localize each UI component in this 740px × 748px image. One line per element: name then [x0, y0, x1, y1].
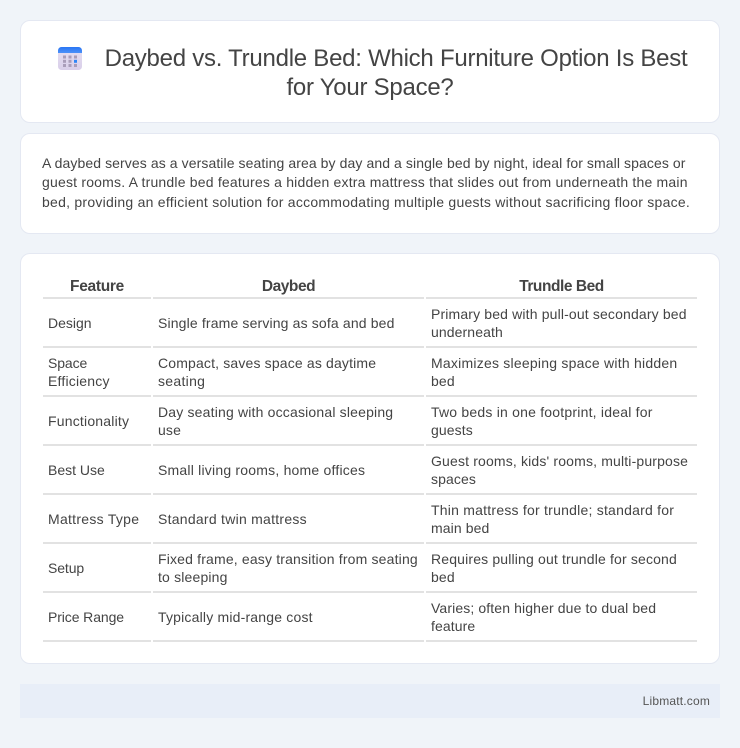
comparison table: seating — [158, 373, 205, 389]
panel: title card — [20, 20, 720, 123]
text block: intro — [42, 155, 690, 210]
comparison table: Guest rooms, kids' rooms, multi-purpose — [431, 453, 688, 469]
title: Daybed vs. Trundle Bed: Which Furniture Option Is Best — [105, 45, 687, 72]
comparison table: Two beds in one footprint, ideal for — [431, 404, 653, 420]
text block: intro: bed, providing an efficient solution for accommodating multiple guests without sacrificing floor space. — [42, 194, 690, 210]
comparison table: main bed — [431, 520, 489, 536]
comparison table: spaces — [431, 471, 476, 487]
text block: intro: guest rooms. A trundle bed features a hidden extra mattress that slides out from underneath the main — [42, 174, 688, 190]
comparison table: Requires pulling out trundle for second — [431, 551, 677, 567]
comparison table: bed — [431, 569, 455, 585]
comparison table: guests — [431, 422, 473, 438]
comparison table: to sleeping — [158, 569, 228, 585]
comparison table: Efficiency — [48, 373, 110, 389]
table rows — [48, 306, 688, 634]
footer — [20, 684, 720, 718]
comparison table: Typically mid-range cost — [158, 609, 313, 625]
comparison table: Setup — [48, 560, 84, 576]
text block: intro: A daybed serves as a versatile seating area by day and a single bed by night, ideal for small spaces or — [42, 155, 686, 171]
table header — [70, 278, 604, 295]
footer credit: Libmatt.com — [643, 694, 710, 708]
comparison table: Functionality — [48, 413, 129, 429]
title: for Your Space? — [286, 74, 454, 101]
icon: calendar — [58, 47, 82, 70]
comparison table: Varies; often higher due to dual bed — [431, 600, 656, 616]
comparison table: Single frame serving as sofa and bed — [158, 315, 395, 331]
comparison table: underneath — [431, 324, 503, 340]
comparison table: Price Range — [48, 609, 124, 625]
panel: intro card — [20, 133, 720, 234]
comparison table — [43, 278, 697, 642]
comparison table: Trundle Bed — [519, 278, 604, 295]
comparison table: use — [158, 422, 181, 438]
comparison table: Design — [48, 315, 92, 331]
comparison table: Best Use — [48, 462, 105, 478]
comparison table: Day seating with occasional sleeping — [158, 404, 393, 420]
comparison table: feature — [431, 618, 475, 634]
comparison table: Mattress Type — [48, 511, 139, 527]
comparison table: Primary bed with pull-out secondary bed — [431, 306, 687, 322]
comparison table: Standard twin mattress — [158, 511, 307, 527]
comparison table: Fixed frame, easy transition from seating — [158, 551, 418, 567]
comparison table: Small living rooms, home offices — [158, 462, 365, 478]
comparison table: bed — [431, 373, 455, 389]
comparison table: Space — [48, 355, 87, 371]
comparison table: Daybed — [262, 278, 315, 295]
comparison table: Feature — [70, 278, 124, 295]
comparison table: Maximizes sleeping space with hidden — [431, 355, 677, 371]
comparison table: Thin mattress for trundle; standard for — [431, 502, 674, 518]
title — [105, 45, 688, 101]
comparison table: Compact, saves space as daytime — [158, 355, 376, 371]
panel: comparison table card — [20, 253, 720, 664]
